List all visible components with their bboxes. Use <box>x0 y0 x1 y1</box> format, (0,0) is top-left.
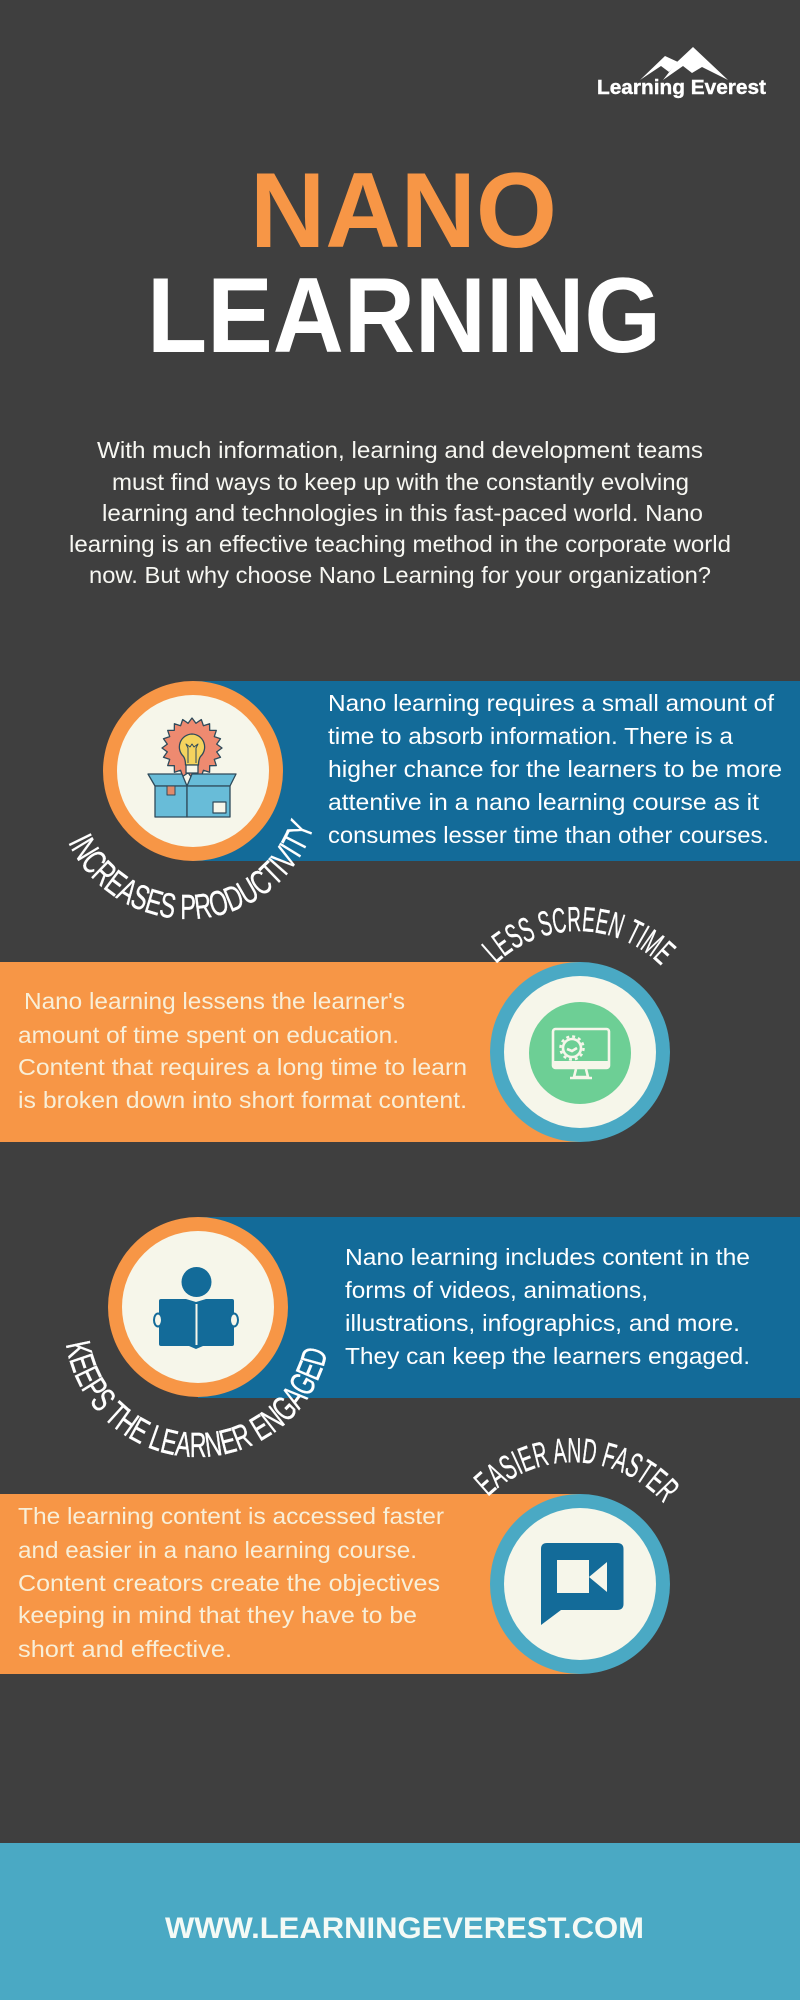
body text: attentive in a nano learning course as it <box>328 789 759 815</box>
body text <box>18 988 467 1113</box>
title: NANO <box>250 150 557 270</box>
intro text: With much information, learning and development teams <box>97 437 703 463</box>
curved heading: EASIER AND FASTER <box>473 1438 678 1504</box>
title: LEARNING <box>147 255 661 375</box>
curved heading: KEEPS THE LEARNER ENGAGED <box>66 1340 326 1458</box>
body text <box>328 690 782 848</box>
body text <box>345 1244 750 1369</box>
body text: and easier in a nano learning course. <box>18 1537 417 1563</box>
intro text: now. But why choose Nano Learning for your organization? <box>89 562 711 588</box>
logo: Learning Everest: Learning Everest <box>597 77 766 99</box>
panel: keeps the learner engaged <box>66 1217 800 1458</box>
body text: keeping in mind that they have to be <box>18 1602 417 1628</box>
body text: is broken down into short format content. <box>18 1087 467 1113</box>
icon circle: inner <box>122 1231 274 1383</box>
panel: increases productivity <box>68 681 800 920</box>
icon circle: ring <box>103 681 283 861</box>
intro text <box>69 437 731 588</box>
body text: illustrations, infographics, and more. <box>345 1310 740 1336</box>
curved heading: INCREASES PRODUCTIVITY <box>68 818 312 920</box>
footer url: WWW.LEARNINGEVEREST.COM <box>165 1912 644 1945</box>
icon circle: inner <box>504 976 656 1128</box>
body text: Nano learning requires a small amount of <box>328 690 774 716</box>
body text: higher chance for the learners to be more <box>328 756 782 782</box>
body text: time to absorb information. There is a <box>328 723 734 749</box>
title <box>147 150 661 375</box>
intro text: learning and technologies in this fast-paced world. Nano <box>102 500 703 526</box>
icon circle: ring <box>490 1494 670 1674</box>
icon circle: ring <box>108 1217 288 1397</box>
body text: consumes lesser time than other courses. <box>328 822 769 848</box>
panel: easier and faster <box>0 1438 678 1674</box>
body text: short and effective. <box>18 1636 232 1662</box>
icon circle: inner <box>504 1508 656 1660</box>
icon: person reading <box>154 1267 238 1349</box>
icon circle: ring <box>490 962 670 1142</box>
band: orange <box>0 1494 580 1674</box>
footer band <box>0 1843 800 2000</box>
icon: monitor with clock <box>529 1002 631 1104</box>
band: orange <box>0 962 580 1142</box>
body text: amount of time spent on education. <box>18 1022 399 1048</box>
body text: Nano learning lessens the learner's <box>24 988 405 1014</box>
logo: Learning Everest <box>597 47 766 99</box>
panel: less screen time <box>0 906 677 1142</box>
body text: Content that requires a long time to learn <box>18 1054 467 1080</box>
body text: Content creators create the objectives <box>18 1570 440 1596</box>
curved heading: LESS SCREEN TIME <box>481 906 677 966</box>
body text: They can keep the learners engaged. <box>345 1343 750 1369</box>
icon circle: inner <box>117 695 269 847</box>
body text: forms of videos, animations, <box>345 1277 648 1303</box>
intro text: learning is an effective teaching method in the corporate world <box>69 531 731 557</box>
icon: light bulb in a box <box>148 718 236 817</box>
body text: Nano learning includes content in the <box>345 1244 750 1270</box>
body text <box>18 1503 444 1662</box>
band: blue <box>198 1217 800 1398</box>
intro text: must find ways to keep up with the constantly evolving <box>112 469 689 495</box>
band: blue <box>193 681 800 861</box>
body text: The learning content is accessed faster <box>18 1503 444 1529</box>
icon: video chat bubble <box>541 1543 624 1625</box>
